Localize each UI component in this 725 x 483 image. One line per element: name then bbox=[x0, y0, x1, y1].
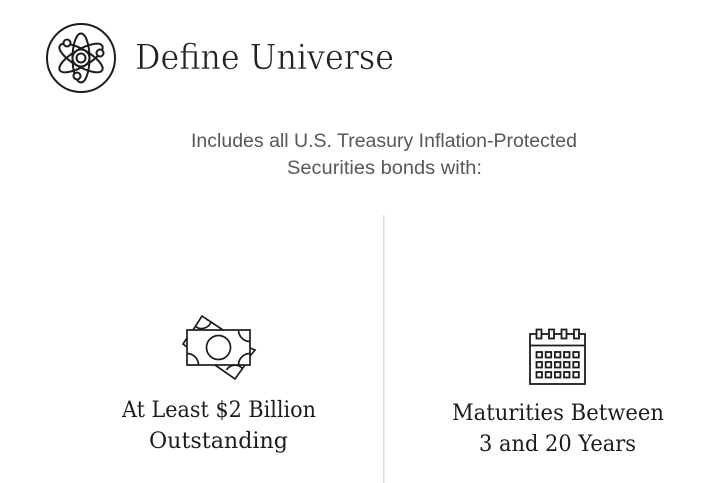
icon: atom bbox=[47, 24, 115, 92]
panel: maturity range bbox=[452, 330, 664, 457]
panel: minimum outstanding bbox=[121, 316, 316, 454]
intro text bbox=[191, 131, 577, 179]
intro text: Securities bonds with: bbox=[287, 158, 482, 179]
label: at least 2 billion bbox=[121, 398, 316, 454]
icon: banknotes bbox=[183, 316, 255, 379]
label: maturities bbox=[452, 401, 664, 457]
intro text: Includes all U.S. Treasury Inflation-Protected bbox=[191, 131, 577, 152]
label: maturities: 3 and 20 Years bbox=[479, 432, 636, 457]
label: at least 2 billion: At Least $2 Billion bbox=[121, 398, 316, 423]
title: Define Universe bbox=[135, 38, 394, 78]
label: at least 2 billion: Outstanding bbox=[149, 429, 288, 454]
icon: calendar bbox=[530, 330, 585, 384]
label: maturities: Maturities Between bbox=[452, 401, 664, 426]
